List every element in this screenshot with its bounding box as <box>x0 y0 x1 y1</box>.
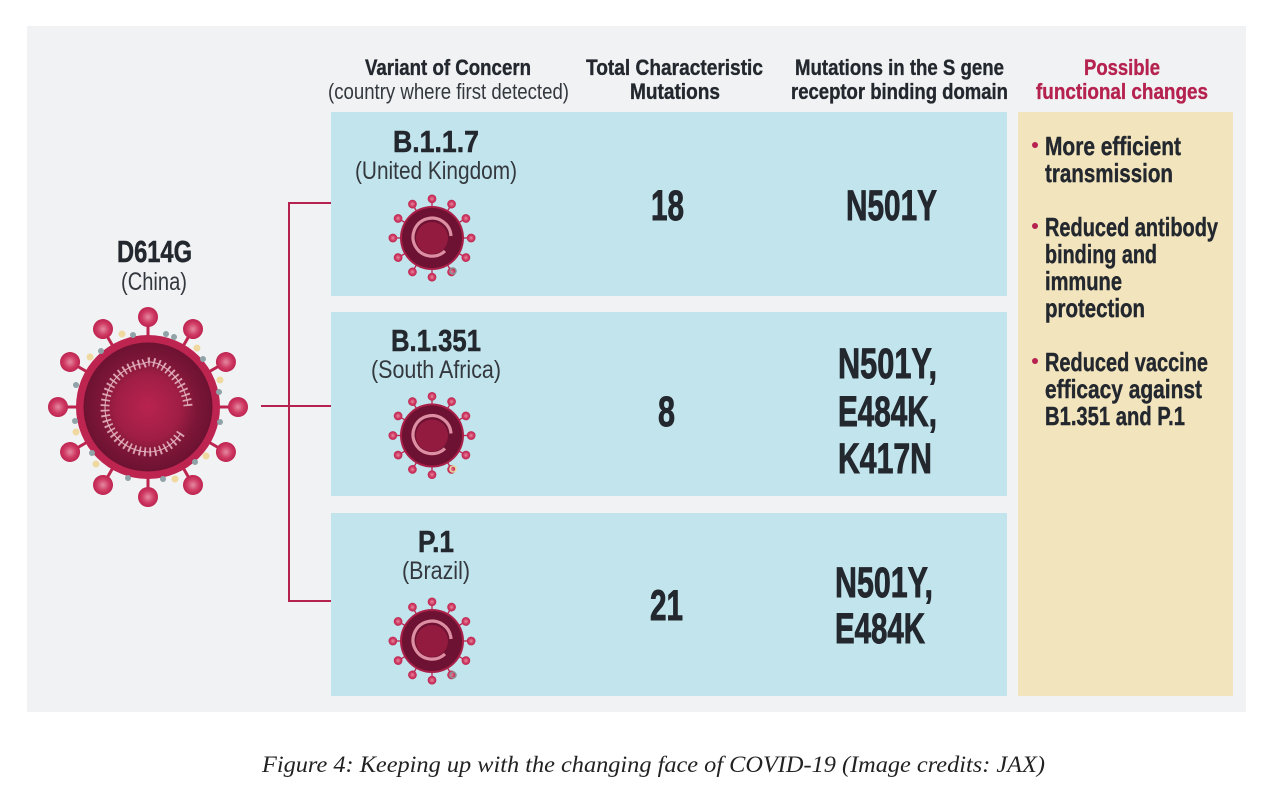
panel: B.1.1.7 row <box>331 112 1007 296</box>
P.1 variant label: (Brazil) <box>402 557 470 585</box>
icon: B.1.351 virus <box>388 392 476 479</box>
bullet: antibody binding: Reduced antibody <box>1045 212 1218 242</box>
icon: D614G virus <box>48 307 248 507</box>
figure caption: Figure 4: Keeping up with the changing face of COVID-19 (Image credits: JAX) <box>261 752 1045 778</box>
heading: total characteristic mutations: Total Characteristic <box>586 55 763 80</box>
bullet: antibody binding: immune <box>1045 266 1122 296</box>
mutations: P.1: E484K <box>835 605 925 653</box>
bullet: antibody binding <box>1032 212 1218 323</box>
bullet: transmission <box>1032 131 1181 188</box>
surface proteins <box>72 330 224 482</box>
connector lines <box>261 203 331 601</box>
heading: variant of concern <box>328 55 569 104</box>
heading: possible functional changes: functional changes <box>1036 79 1208 104</box>
icon: P.1 virus <box>388 598 476 684</box>
heading: variant of concern: Variant of Concern <box>365 55 531 80</box>
mutations: P.1: N501Y, <box>835 559 933 607</box>
D614G label: D614G <box>117 234 192 269</box>
panel: functional changes <box>1018 112 1233 696</box>
count: 8: 8 <box>658 388 675 436</box>
bullet: transmission: More efficient <box>1045 131 1181 161</box>
heading: total characteristic mutations: Mutations <box>630 79 720 104</box>
mutations: B.1.351 <box>838 340 937 483</box>
RNA strand <box>105 362 188 452</box>
bullet: vaccine efficacy: B1.351 and P.1 <box>1045 401 1185 431</box>
mutations: B.1.351: E484K, <box>838 388 937 436</box>
mutations: B.1.1.7: N501Y <box>846 182 937 230</box>
count: 18: 18 <box>651 182 684 230</box>
heading: total characteristic mutations <box>586 55 763 104</box>
bullet: antibody binding: protection <box>1045 293 1145 323</box>
bullet: vaccine efficacy: efficacy against <box>1045 374 1202 404</box>
B.1.1.7 variant label <box>355 124 517 185</box>
B.1.1.7 variant label: B.1.1.7 <box>393 124 479 159</box>
heading: variant of concern: (country where first detected) <box>328 79 569 104</box>
B.1.351 variant label: B.1.351 <box>391 323 481 358</box>
panel: P.1 row <box>331 513 1007 696</box>
B.1.1.7 variant label: (United Kingdom) <box>355 157 517 185</box>
B.1.351 variant label: (South Africa) <box>371 356 501 384</box>
heading: possible functional changes <box>1036 55 1208 104</box>
bullet: vaccine efficacy <box>1032 347 1208 431</box>
D614G label <box>117 234 192 296</box>
icon: B.1.1.7 virus <box>388 194 476 282</box>
bullet: transmission: transmission <box>1045 158 1173 188</box>
count: 21: 21 <box>650 582 683 630</box>
panel: B.1.351 row <box>331 312 1007 496</box>
mutations: B.1.351: K417N <box>838 435 932 483</box>
heading: mutations in S gene: receptor binding domain <box>791 79 1008 104</box>
P.1 variant label <box>402 524 470 585</box>
B.1.351 variant label <box>371 323 501 384</box>
D614G label: (China) <box>121 268 187 296</box>
heading: mutations in S gene <box>791 55 1008 104</box>
heading: mutations in S gene: Mutations in the S gene <box>795 55 1004 80</box>
mutations: B.1.351: N501Y, <box>838 340 937 388</box>
bullet: vaccine efficacy: Reduced vaccine <box>1045 347 1208 377</box>
P.1 variant label: P.1 <box>418 524 454 559</box>
heading: possible functional changes: Possible <box>1084 55 1160 80</box>
bullet: antibody binding: binding and <box>1045 239 1157 269</box>
mutations: P.1 <box>835 559 933 653</box>
